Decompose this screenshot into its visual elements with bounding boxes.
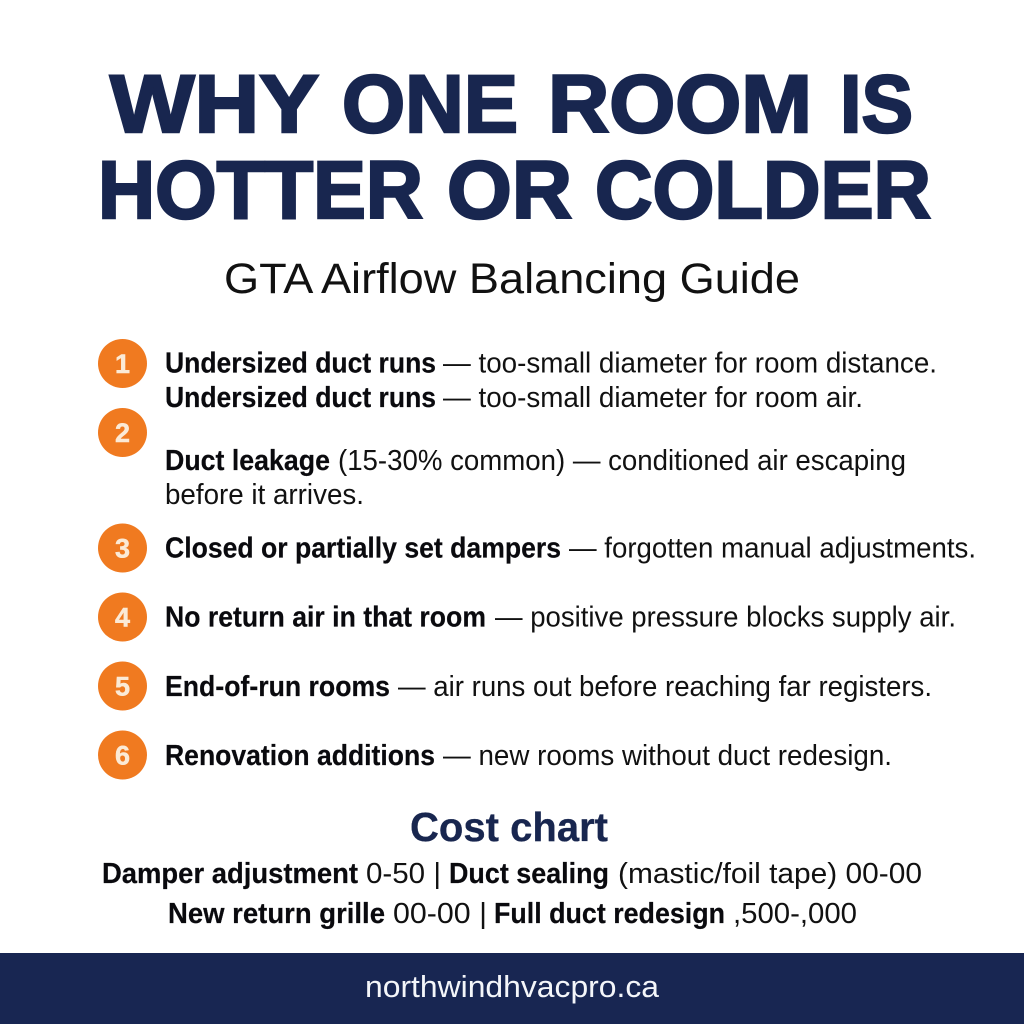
item 1 text — [165, 348, 937, 380]
item 1 text: — too-small diameter for room distance. — [443, 348, 937, 380]
cost chart line 2: New return grille — [168, 898, 385, 930]
item 2 text: Duct leakage — [165, 445, 330, 477]
item 6 text — [165, 740, 892, 772]
item 3 badge — [98, 524, 147, 572]
subtitle: GTA Airflow Balancing Guide — [224, 255, 800, 303]
item 2 badge: 2 — [115, 418, 130, 448]
list of causes — [98, 339, 976, 780]
item 4 badge — [98, 592, 147, 642]
item 4 text — [165, 602, 956, 634]
item 2 badge — [98, 408, 147, 457]
title: COLDER — [595, 145, 931, 236]
item 5 badge: 5 — [115, 672, 130, 702]
cost chart line 1 — [102, 858, 922, 890]
item 5 text: — air runs out before reaching far registers. — [398, 671, 932, 703]
item 1 text: Undersized duct runs — [165, 348, 436, 380]
item 2 text — [165, 445, 906, 511]
cost chart line 2: 00-00 | — [393, 898, 487, 930]
cost chart line 1: 0-50 | — [366, 858, 441, 890]
item 4 badge: 4 — [115, 602, 130, 632]
item 5 badge — [98, 662, 147, 710]
footer bar — [0, 953, 1024, 1024]
cost chart line 2: ,500-,000 — [733, 898, 857, 930]
item 3 text: Closed or partially set dampers — [165, 532, 561, 564]
cost chart heading: Cost chart — [410, 804, 608, 850]
cost chart line 1: Damper adjustment — [102, 858, 358, 890]
item 2 text: before it arrives. — [165, 479, 364, 511]
item 3 text: — forgotten manual adjustments. — [569, 532, 976, 564]
cost chart line 1: Duct sealing — [449, 858, 609, 890]
item 3 badge: 3 — [115, 534, 130, 564]
title: ROOM — [548, 59, 812, 150]
title: IS — [840, 59, 913, 150]
item 3 text — [165, 532, 976, 564]
title: HOTTER — [98, 145, 423, 236]
title: OR — [447, 145, 572, 236]
item 4 text: No return air in that room — [165, 602, 486, 634]
item 1 repeated text: Undersized duct runs — [165, 382, 436, 414]
item 4 text: — positive pressure blocks supply air. — [495, 602, 956, 634]
cost chart line 2 — [168, 898, 857, 930]
item 1 badge — [98, 339, 147, 388]
title — [98, 59, 931, 236]
title: WHY — [110, 59, 319, 150]
cost chart line 2: Full duct redesign — [494, 898, 725, 930]
cost chart line 1: (mastic/foil tape) 00-00 — [618, 858, 922, 890]
item 1 repeated text — [165, 382, 863, 414]
website url: northwindhvacpro.ca — [365, 969, 660, 1004]
item 1 repeated text: — too-small diameter for room air. — [443, 382, 863, 414]
item 6 text: — new rooms without duct redesign. — [443, 740, 892, 772]
item 6 text: Renovation additions — [165, 740, 435, 772]
item 5 text: End-of-run rooms — [165, 671, 390, 703]
item 5 text — [165, 671, 932, 703]
item 1 badge: 1 — [115, 349, 130, 379]
item 6 badge — [98, 730, 147, 780]
item 6 badge: 6 — [115, 740, 130, 770]
title: ONE — [342, 59, 518, 150]
item 2 text: (15-30% common) — conditioned air escaping — [338, 445, 906, 477]
